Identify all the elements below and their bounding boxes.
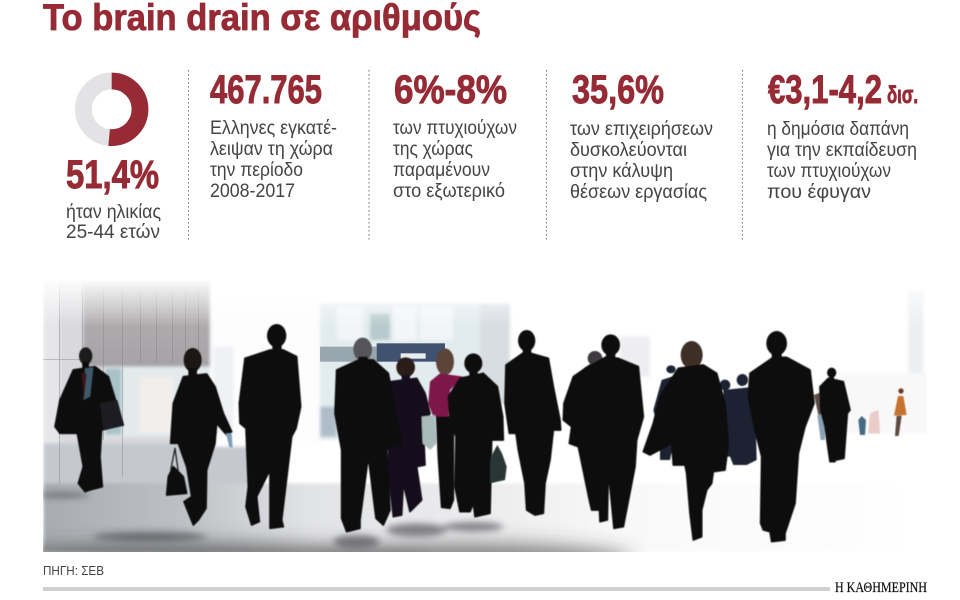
person 6: pink top — [428, 348, 463, 508]
illustration: commuters silhouetted in a bright passage — [0, 270, 940, 582]
person 2 with handbag — [167, 348, 233, 525]
description: age: ήταν ηλικίας — [66, 202, 161, 223]
patterned handbag — [490, 445, 507, 483]
publisher logo: Η ΚΑΘΗΜΕΡΙΝΗ — [835, 580, 927, 596]
people: right group — [490, 330, 907, 542]
description: emigrants: 2008-2017 — [210, 181, 295, 202]
person 15 — [820, 368, 850, 462]
person 1 with bag — [55, 347, 124, 492]
description: graduates abroad: στο εξωτερικό — [393, 181, 505, 202]
person 12: woman in coat — [643, 341, 728, 540]
description: public cost: που έφυγαν — [767, 182, 871, 203]
source note: ΠΗΓΗ: ΣΕΒ — [43, 563, 104, 578]
figure: 467.765: 467.765 — [210, 68, 322, 112]
figure: 51,4%: 51,4% — [66, 153, 159, 197]
description: public cost: των πτυχιούχων — [767, 161, 891, 182]
person 3 — [239, 324, 301, 528]
description: public cost: για την εκπαίδευση — [767, 140, 917, 161]
description: age: 25-44 ετών — [66, 222, 160, 243]
figure: 35,6%: 35,6% — [572, 68, 664, 112]
stat: public cost — [767, 68, 918, 203]
stat: emigrants — [210, 68, 337, 202]
description: graduates abroad: της χώρας — [393, 139, 473, 160]
photo background — [0, 270, 940, 582]
description: emigrants: Ελληνες εγκατέ- — [210, 118, 337, 139]
figure: 6%-8%: 6%-8% — [394, 68, 507, 112]
figure: 3.1-4.2 billion euros: δισ. — [887, 82, 918, 109]
person in jeans — [814, 393, 825, 440]
person in orange coat — [894, 388, 907, 436]
footer rule — [43, 587, 830, 591]
person 8 — [505, 330, 561, 515]
stat: age share with donut — [66, 81, 161, 243]
description: graduates abroad: παραμένουν — [393, 160, 490, 181]
person 14 — [748, 331, 814, 542]
description: businesses: στην κάλυψη — [570, 161, 673, 182]
people: left group — [55, 324, 503, 532]
description: graduates abroad: των πτυχιούχων — [393, 118, 517, 139]
figure: 3.1-4.2 billion euros: €3,1-4,2 — [768, 68, 882, 112]
description: emigrants: την περίοδο — [210, 160, 303, 181]
person 5: purple coat with light bag — [388, 357, 437, 517]
description: businesses: των επιχειρήσεων — [570, 119, 713, 140]
person 4 — [335, 338, 402, 532]
donut chart: 51.4% — [83, 81, 140, 138]
person 7 — [448, 353, 503, 517]
distant walkers — [653, 365, 757, 465]
description: public cost: η δημόσια δαπάνη — [767, 119, 909, 140]
description: businesses: θέσεων εργασίας — [570, 182, 707, 203]
stat: graduates abroad — [393, 68, 517, 202]
person 10 — [582, 334, 643, 528]
small far figures — [858, 410, 880, 435]
description: emigrants: λειψαν τη χώρα — [210, 139, 333, 160]
stat: businesses — [570, 68, 713, 203]
description: businesses: δυσκολεύονται — [570, 140, 687, 161]
person 9 — [563, 351, 603, 510]
